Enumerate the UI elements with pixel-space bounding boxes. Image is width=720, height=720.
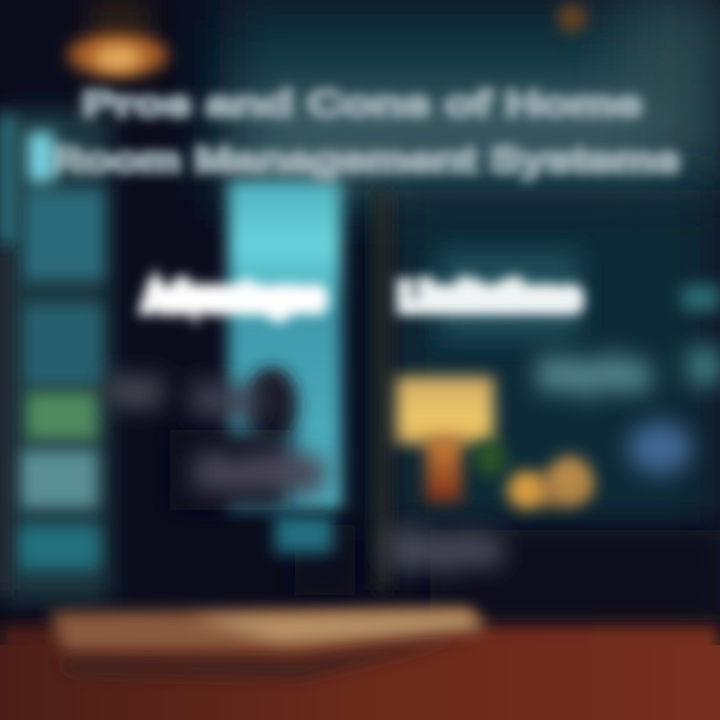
cons list text [390, 348, 718, 568]
heading: cons: Limitations [400, 276, 580, 317]
pros list text: Ease [195, 380, 255, 418]
blue cushion [628, 422, 692, 474]
title [50, 83, 680, 180]
table lamp [396, 376, 494, 502]
plant with yellow flowers [474, 440, 594, 509]
heading: pros: Advantages [144, 276, 324, 317]
floor [0, 625, 720, 720]
rug [50, 608, 488, 678]
cons list text: Upkeep fees [390, 530, 500, 568]
pros list text: Flexibility [198, 454, 323, 492]
right panel patch [682, 285, 720, 311]
title: Pros and Cons of Home [82, 83, 642, 124]
title accent: cyan edge [28, 132, 54, 182]
pros list text: Cost [110, 372, 158, 410]
ceiling lamp [68, 0, 586, 77]
pros list text [110, 372, 323, 492]
cyan window panel [170, 180, 355, 595]
left bookshelf panel [0, 115, 104, 590]
cons list text: Setup time [540, 355, 648, 393]
title: Room Management Systems [50, 139, 680, 180]
